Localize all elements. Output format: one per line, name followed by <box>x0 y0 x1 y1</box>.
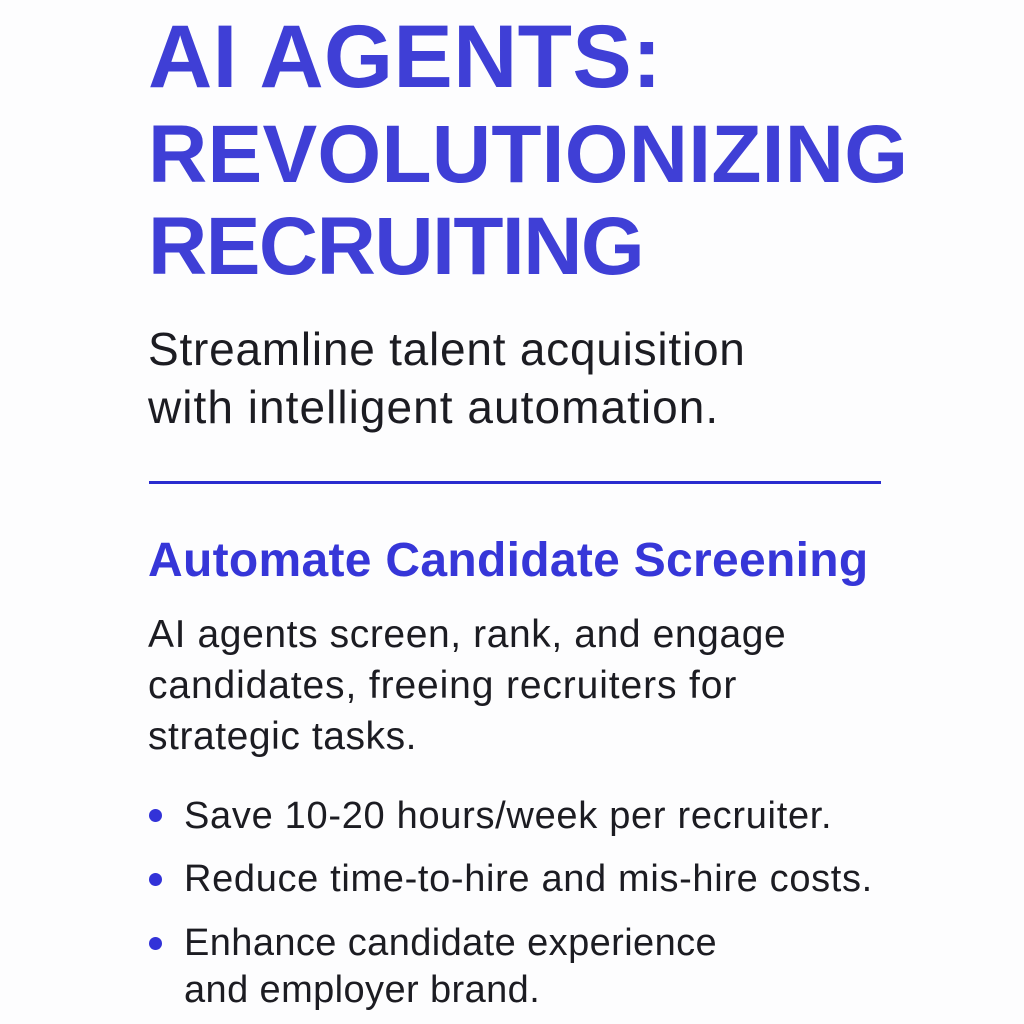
description text: strategic tasks. <box>148 715 417 758</box>
description text: candidates, freeing recruiters for <box>148 664 737 707</box>
title <box>148 6 908 292</box>
description text <box>148 613 786 758</box>
bullet list <box>149 795 873 1011</box>
bullet 1: Save 10-20 hours/week per recruiter. <box>184 795 832 837</box>
section heading: Automate Candidate Screening <box>148 534 869 587</box>
description text: AI agents screen, rank, and engage <box>148 613 786 656</box>
title: RECRUITING <box>148 201 643 292</box>
bullet 3 <box>149 922 717 1011</box>
bullet 3: and employer brand. <box>184 969 540 1011</box>
subtitle: Streamline talent acquisition <box>148 323 746 375</box>
title: REVOLUTIONIZING <box>148 109 908 200</box>
bullet 3: Enhance candidate experience <box>184 922 717 964</box>
subtitle <box>148 323 746 433</box>
subtitle: with intelligent automation. <box>148 381 719 433</box>
bullet 2: Reduce time-to-hire and mis-hire costs. <box>184 858 873 900</box>
divider <box>149 481 881 484</box>
title: AI AGENTS: <box>148 6 662 106</box>
